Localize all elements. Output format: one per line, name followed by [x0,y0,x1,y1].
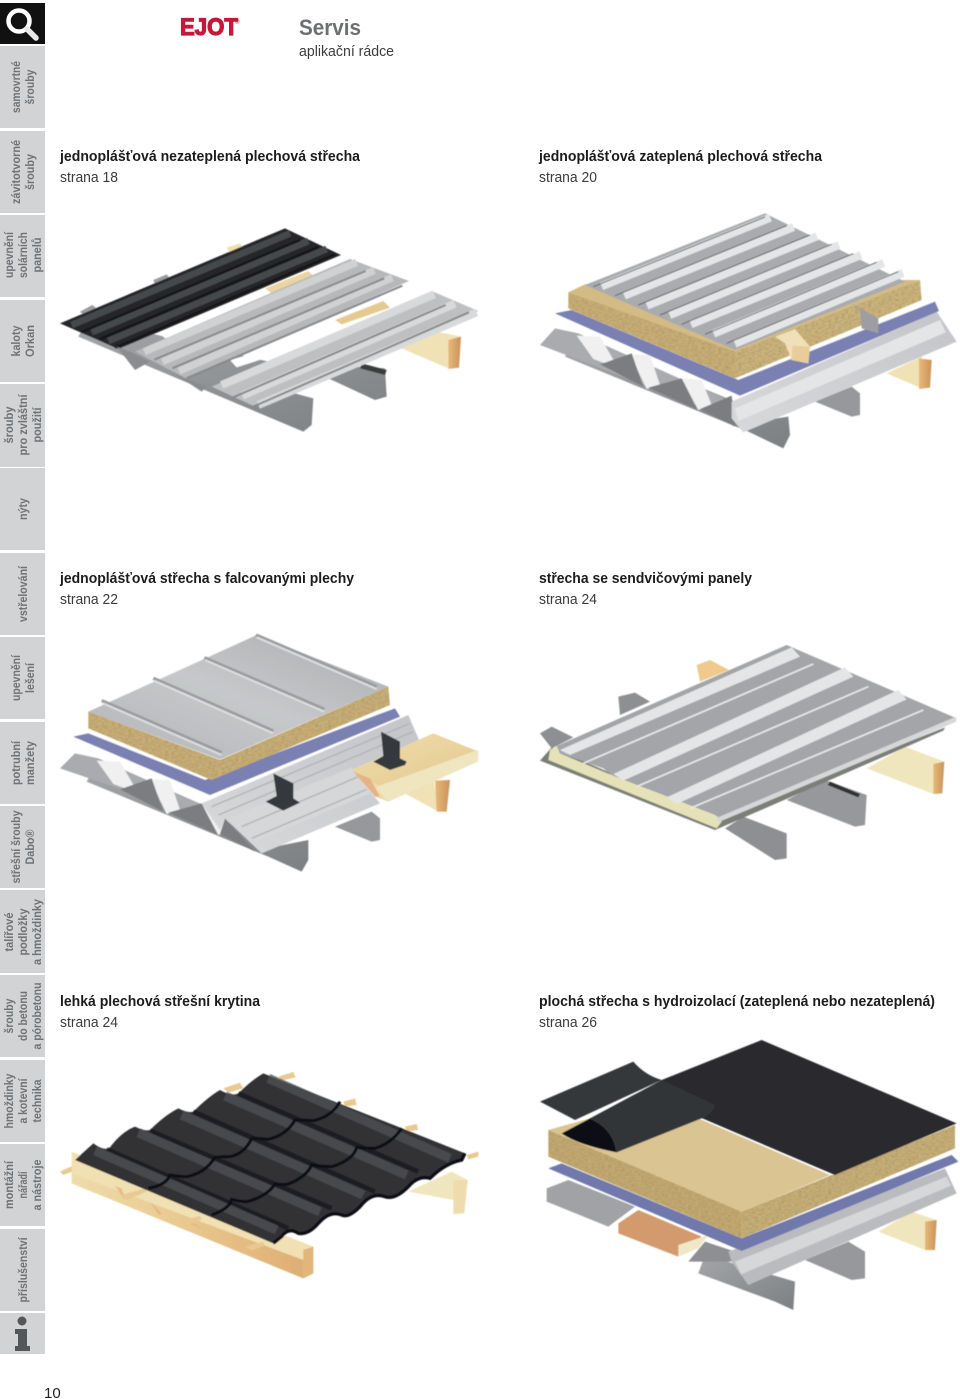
tab: upevnění lešení: lešení [23,662,37,693]
tab: šrouby pro zvláštní použití [0,384,45,467]
tab: montážní nářadí a nástroje: a nástroje [30,1159,44,1210]
heading: roof type 3 [59,571,354,608]
tab: potrubní manžety: potrubní [9,740,23,785]
tab: montážní nářadí a nástroje [0,1144,45,1226]
tab: samovrtné šrouby: samovrtné [9,61,23,113]
illustration: lightweight sheet tile roof [60,1072,478,1278]
heading: roof type 2: strana 20 [539,170,597,186]
tab: příslušenství: příslušenství [16,1237,30,1302]
tab: šrouby pro zvláštní použití: šrouby [2,406,16,444]
heading: roof type 1 [59,149,361,186]
tab: závitotvorné šrouby: závitotvorné [9,140,23,204]
tab: kaloty Orkan: kaloty [9,325,23,356]
illustration: flat roof with waterproofing [540,1040,958,1310]
tab: šrouby do betonu a pórobetonu: do betonu [16,991,30,1041]
heading: roof type 4: střecha se sendvičovými panely [539,571,752,587]
heading: roof type 6: plochá střecha s hydroizolací (zateplená nebo nezateplená) [539,994,935,1010]
tab: upevnění solárních panelů: upevnění [2,231,16,278]
tab: závitotvorné šrouby [0,131,45,213]
EJOT logo: ® [235,19,240,26]
info tab [0,1313,45,1354]
tab: šrouby do betonu a pórobetonu: šrouby [2,998,16,1034]
heading: roof type 1: strana 18 [60,170,118,186]
tab: talířové podložky a hmoždinky: podložky [16,908,30,956]
tab: samovrtné šrouby [0,46,45,128]
tab: upevnění solárních panelů [0,215,45,297]
heading: roof type 5 [60,994,261,1031]
tab: potrubní manžety [0,722,45,804]
tab: talířové podložky a hmoždinky: talířové [2,912,16,952]
heading: roof type 5: strana 24 [60,1015,118,1031]
heading: roof type 6: strana 26 [539,1015,597,1031]
tab: nýty: nýty [16,498,30,520]
tab: šrouby pro zvláštní použití: použití [30,407,44,442]
title: Servis: Servis [299,15,361,40]
heading: roof type 3: strana 22 [60,592,118,608]
tab: kaloty Orkan: Orkan [23,325,37,357]
tab: upevnění lešení [0,637,45,719]
tab: příslušenství [0,1229,45,1311]
tab: montážní nářadí a nástroje: montážní [2,1160,16,1209]
tab: hmoždinky a kotevní technika: technika [30,1079,44,1122]
tab: střešní šrouby Dabo: Dabo® [23,829,37,864]
heading: roof type 5: lehká plechová střešní krytina [60,994,261,1010]
tab: talířové podložky a hmoždinky [0,890,45,973]
tab: vstřelování: vstřelování [16,565,30,622]
tab: hmoždinky a kotevní technika: a kotevní [16,1078,30,1124]
heading: roof type 2: jednoplášťová zateplená plechová střecha [538,149,823,165]
heading: roof type 1: jednoplášťová nezateplená plechová střecha [59,149,361,165]
illustration: insulated sheet roof [540,213,957,448]
tab: střešní šrouby Dabo [0,806,45,888]
heading: roof type 6 [539,994,935,1031]
tab: střešní šrouby Dabo: střešní šrouby [9,810,23,884]
illustration: standing seam roof [60,635,478,872]
tab: talířové podložky a hmoždinky: a hmoždinky [30,899,44,965]
tab: hmoždinky a kotevní technika [0,1060,45,1142]
heading: roof type 2 [538,149,823,186]
sidebar navigation [0,3,45,1354]
tab: šrouby do betonu a pórobetonu: a pórobetonu [30,982,44,1050]
EJOT logo: EJOT [180,14,238,41]
tab: hmoždinky a kotevní technika: hmoždinky [2,1073,16,1128]
tab: nýty [0,468,45,550]
tab: šrouby pro zvláštní použití: pro zvláštní [16,394,30,456]
tab: upevnění lešení: upevnění [9,654,23,701]
heading: roof type 3: jednoplášťová střecha s falcovanými plechy [59,571,354,587]
illustration: sandwich panel roof [540,645,957,860]
tab: šrouby do betonu a pórobetonu [0,975,45,1057]
tab: upevnění solárních panelů: panelů [30,238,44,272]
heading: roof type 4 [539,571,752,608]
tab: potrubní manžety: manžety [23,741,37,785]
illustration: uninsulated sheet roof [60,228,478,432]
tab: montážní nářadí a nástroje: nářadí [16,1171,30,1198]
tab: samovrtné šrouby: šrouby [23,69,37,104]
subtitle: aplikační rádce [299,44,394,60]
heading: roof type 4: strana 24 [539,592,597,608]
tab: kaloty Orkan [0,300,45,382]
tab: závitotvorné šrouby: šrouby [23,154,37,190]
tab: upevnění solárních panelů: solárních [16,232,30,278]
tab: vstřelování [0,553,45,635]
search tab [0,3,45,44]
